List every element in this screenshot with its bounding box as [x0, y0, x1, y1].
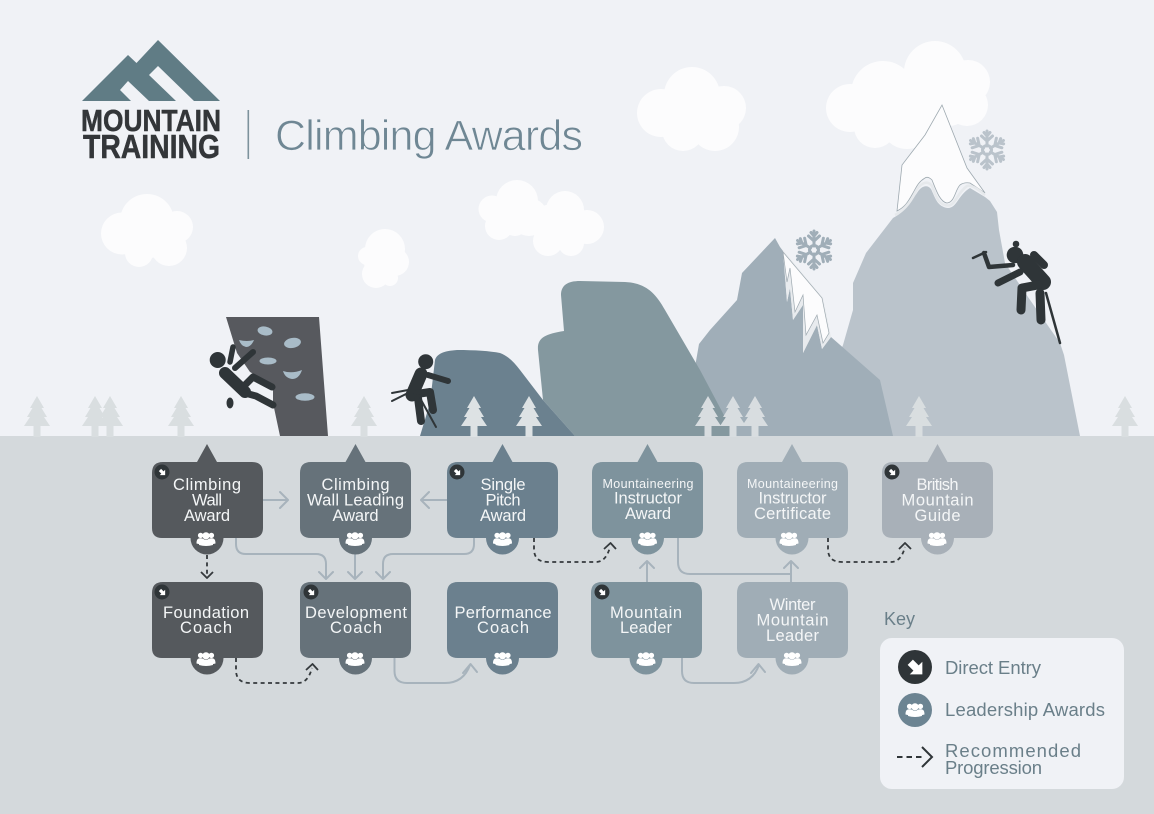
label: Mountaineering — [747, 477, 838, 491]
key icon: direct entry — [898, 650, 932, 684]
card: Mountain Leader — [591, 582, 702, 674]
label: Leader — [766, 627, 820, 645]
leadership icon — [346, 652, 364, 666]
snow cap — [897, 105, 985, 211]
key label: direct entry: Direct Entry — [945, 657, 1042, 678]
trees: grove — [695, 396, 768, 437]
label — [305, 604, 407, 637]
cloud: centre — [478, 180, 604, 256]
leadership icon — [196, 532, 216, 546]
dashed arrow: Instructor Certificate to Guide — [828, 538, 911, 562]
mountain: low blue crag — [420, 350, 575, 436]
label: Coach — [477, 619, 529, 637]
label: Mountaineering — [602, 477, 694, 491]
dashed arrow: Climbing Wall to Foundation — [201, 555, 213, 578]
mountain: far right snow peak — [820, 105, 1080, 436]
label: Instructor — [758, 490, 827, 508]
arrow: Instructor Award to Instructor Certificate — [678, 538, 791, 574]
dashed arrow: Foundation to Development — [236, 658, 318, 683]
leadership icon — [196, 652, 216, 666]
label: Award — [480, 507, 526, 525]
arrow: Mountain Leader to Winter — [682, 658, 765, 683]
label: Coach — [180, 619, 232, 637]
snowflake: snow peak — [968, 131, 1006, 169]
label: Award — [332, 507, 378, 525]
card: Mountaineering Instructor Certificate — [737, 444, 848, 554]
label — [307, 476, 404, 525]
title divider — [248, 110, 249, 159]
label — [480, 476, 526, 525]
card: Development Coach — [300, 582, 411, 674]
snow streak — [783, 252, 829, 343]
arrow: Climbing Wall to Development — [236, 538, 333, 579]
key label: recommended progression — [945, 740, 1081, 778]
label — [173, 476, 241, 525]
arrow: Single Pitch to Wall Leading — [421, 492, 447, 508]
climber on crag — [392, 354, 448, 427]
cloud: upper centre — [637, 67, 746, 151]
arrow: Development to Performance — [394, 658, 477, 683]
ground — [0, 436, 1154, 814]
leadership icon — [780, 532, 798, 546]
leadership icon — [636, 652, 656, 666]
trees: on mountains — [461, 396, 542, 437]
label — [747, 477, 838, 523]
climbing wall holds — [239, 325, 314, 401]
direct entry badge — [450, 464, 464, 480]
mountain: jagged peak — [695, 238, 893, 436]
label: Award — [184, 507, 230, 525]
arrow: Single Pitch to Development — [376, 538, 474, 579]
direct entry badge — [154, 584, 170, 600]
label: Mountain — [610, 604, 682, 622]
dashed arrow: Single Pitch to Instructor Award — [534, 538, 616, 562]
direct entry badge — [154, 464, 170, 480]
label: British — [916, 476, 958, 494]
label: Climbing — [173, 476, 241, 494]
leadership icon — [782, 652, 802, 666]
arrow: Climbing Wall to Wall Leading — [263, 492, 288, 508]
climber on snow peak — [973, 241, 1060, 343]
key icon: recommended progression arrow — [897, 747, 932, 767]
label: Pitch — [486, 492, 520, 510]
label: Award — [625, 505, 671, 523]
snow shadow band — [895, 183, 985, 215]
arrow: Mountain Leader to Instructor Award — [640, 561, 654, 582]
label: Wall Leading — [307, 492, 404, 510]
cloud: left — [101, 194, 193, 267]
direct entry badge — [884, 464, 900, 480]
climber on wall — [210, 347, 273, 408]
logo: Mountain Training — [81, 40, 221, 165]
key label: leadership awards: Leadership Awards — [945, 699, 1105, 720]
title: Climbing Awards — [275, 112, 583, 160]
label: Instructor — [614, 490, 682, 508]
leadership icon — [493, 652, 512, 666]
label — [602, 477, 694, 523]
label: Single — [480, 476, 526, 494]
label — [163, 604, 249, 637]
arrow: Wall Leading to Development — [348, 555, 362, 579]
climbing wall — [226, 317, 328, 436]
leadership icon — [928, 532, 946, 546]
card: Mountaineering Instructor Award — [592, 444, 703, 554]
card: Single Pitch Award — [447, 444, 558, 554]
label: Mountain — [756, 612, 828, 630]
card: Winter Mountain Leader — [737, 582, 848, 674]
card: Climbing Wall Leading Award — [300, 444, 411, 554]
label — [610, 604, 682, 637]
label: Foundation — [163, 604, 249, 622]
snow band — [783, 250, 831, 353]
card: British Mountain Guide — [882, 444, 993, 554]
label: Coach — [330, 619, 382, 637]
card: Performance Coach — [447, 582, 558, 674]
label: Guide — [914, 507, 960, 525]
logo wordmark line 2: TRAINING — [83, 128, 220, 165]
label — [902, 476, 974, 525]
label: Performance — [454, 604, 552, 622]
card: Foundation Coach — [152, 582, 263, 674]
cloud: small centre — [358, 229, 409, 288]
label: Leader — [620, 619, 672, 637]
snowflake: jagged peak — [795, 231, 833, 269]
label: Development — [305, 604, 407, 622]
label — [454, 604, 552, 637]
leadership icon — [493, 532, 512, 546]
direct entry badge — [594, 584, 610, 600]
label: Winter — [770, 596, 816, 614]
key icon: leadership awards — [898, 693, 932, 727]
label: Climbing — [322, 476, 390, 494]
key label: recommended progression: Progression — [945, 757, 1042, 778]
direct entry badge — [304, 584, 318, 600]
cloud: upper right — [826, 41, 990, 149]
label — [756, 596, 828, 645]
key panel — [880, 638, 1124, 789]
key label: recommended progression: Recommended — [945, 740, 1081, 761]
leadership icon — [638, 532, 657, 546]
mountain: rounded crag — [538, 281, 735, 436]
label: Mountain — [902, 492, 974, 510]
leadership icon — [346, 532, 364, 546]
label: Certificate — [754, 505, 831, 523]
arrow: Winter to Instructor Certificate — [784, 561, 798, 582]
key heading: Key — [884, 609, 915, 629]
trees: on sky — [24, 396, 1138, 437]
card: Climbing Wall Award — [152, 444, 263, 554]
label: Wall — [192, 492, 222, 510]
logo mountain mark — [82, 40, 220, 101]
logo wordmark line 1: MOUNTAIN — [81, 103, 221, 138]
